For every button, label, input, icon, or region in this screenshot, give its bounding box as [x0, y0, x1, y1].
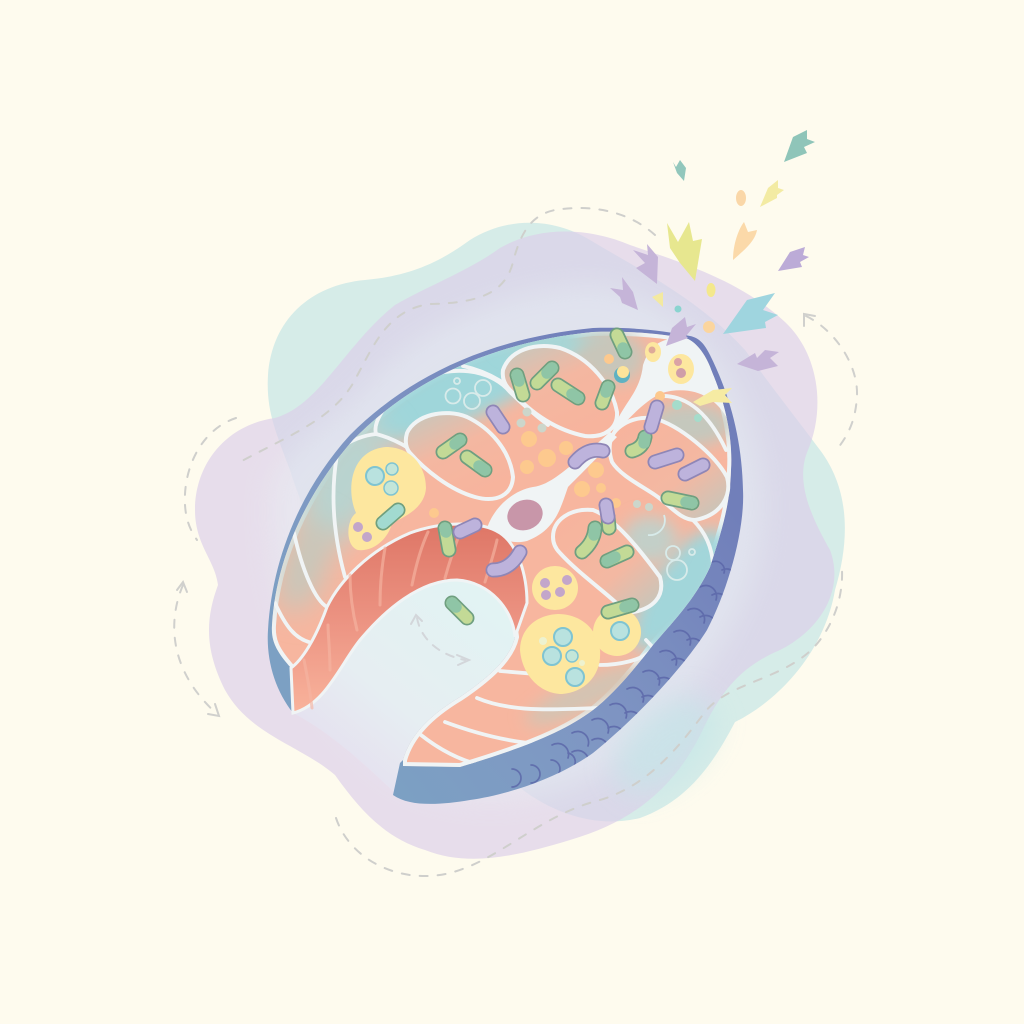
dashed arrow: bottom path — [336, 570, 842, 876]
fragment: purple right — [778, 247, 809, 271]
teal dots — [614, 366, 702, 422]
dashed arrow: left upper path — [185, 418, 236, 540]
dashed arrow: left lower path — [174, 582, 219, 716]
flesh base — [272, 332, 731, 767]
fragment: large yellow — [667, 222, 702, 281]
dashed arrow: top migration path — [240, 208, 655, 462]
confetti fragments — [610, 130, 815, 406]
fragment: large teal far — [784, 130, 815, 162]
bubble outlines — [446, 378, 695, 580]
fragment: yellow drop — [706, 283, 716, 297]
orange nutrient dots — [429, 354, 665, 518]
skin scales — [512, 561, 736, 787]
teal background blob — [268, 223, 845, 821]
skin — [268, 328, 743, 804]
fragment: pale yellow — [760, 180, 784, 207]
yellow fat cell: left with bubbles — [348, 447, 426, 550]
salmon steak — [267, 307, 744, 804]
fragment: large teal — [723, 293, 778, 334]
muscle lobe right — [610, 418, 728, 520]
white spine and branches — [487, 432, 617, 542]
teal wash lower right — [598, 680, 732, 810]
fragment: purple left — [610, 277, 638, 310]
fragment: orange drop — [736, 190, 746, 206]
fragment: purple lower — [737, 350, 779, 371]
green bacteria — [383, 335, 692, 618]
spine centre — [503, 495, 547, 535]
yellow fat cell: single bubble — [593, 608, 641, 656]
muscle lobe top — [503, 346, 617, 436]
fragment: yellow on rim — [693, 388, 732, 406]
muscle divider lines — [275, 366, 726, 765]
flesh colour washes — [274, 332, 730, 733]
muscle lobe lower right — [553, 510, 661, 613]
red belly muscle — [291, 524, 527, 713]
purple bacteria — [460, 407, 703, 570]
belly cavity — [293, 580, 515, 792]
pale wash inside blobs — [269, 285, 764, 801]
fragment: small teal — [673, 160, 686, 181]
yellow fat cell: corner two dots — [668, 354, 694, 384]
belly muscle stripes — [304, 528, 497, 708]
yellow fat cell: large lower — [520, 614, 600, 694]
fragment: purple on rim — [666, 317, 696, 346]
dashed arrow: right path — [804, 314, 857, 448]
purple background blob — [195, 232, 834, 859]
fragment: purple upper — [633, 244, 658, 284]
white collar corner — [612, 338, 728, 434]
fragment: orange dot — [703, 321, 715, 333]
fragment: teal dot — [674, 306, 682, 312]
muscle lobe left — [406, 413, 513, 499]
fragment: peach heart — [733, 222, 757, 260]
fragment: small yellow — [652, 292, 663, 307]
dashed arrow: inside belly — [411, 615, 469, 665]
yellow fat cell: small corner — [645, 342, 661, 362]
pale grey dots — [516, 408, 653, 511]
yellow fat cell: purple dots — [532, 566, 578, 610]
